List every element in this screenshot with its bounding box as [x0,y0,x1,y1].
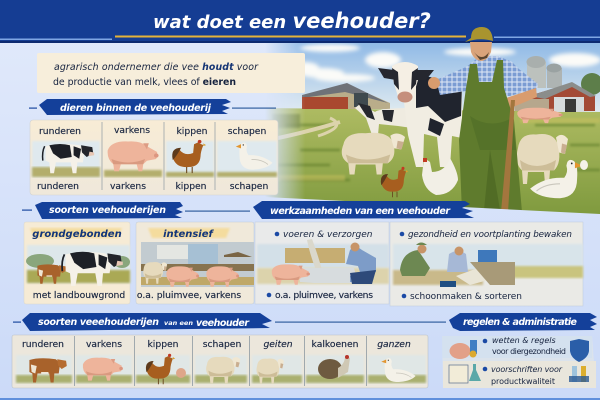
banner: soorten veeehouderijen van een veehouder: soorten veeehouderijen [38,317,159,328]
panel: soorten dieren rij: schapen [203,339,241,350]
icon: shield [570,339,589,362]
pigs far [517,108,563,123]
panel: regelen en administratie: wetten & regels [492,336,556,345]
banner: regelen en administratie: regelen & administratie [463,317,578,328]
panel: dieren: varkens [110,181,146,192]
icon: test tubes [569,366,589,382]
header band [0,0,600,43]
panel: dieren: varkens [114,125,150,136]
panel: definition: agrarisch ondernemer die vee houdt voor [54,62,259,73]
panel: dieren: kippen [176,126,208,137]
panel: dieren [30,120,278,195]
panel: regelen en administratie [442,336,596,388]
chicken orange [381,167,408,197]
panel: grondgebonden: grondgebonden [32,229,122,240]
panel: gezondheid en voortplanting: gezondheid en voortplanting bewaken [408,230,572,240]
title: wat doet een veehouder? [153,9,431,33]
big cow [378,62,462,167]
panel: soorten dieren rij: ganzen [377,339,411,350]
banner: soorten veeehouderijen van een veehouder [13,313,446,331]
geese [530,160,582,198]
meadow [265,108,600,215]
small cow [355,103,408,133]
chicken white [422,158,458,195]
icon: document and flask [449,364,481,383]
panel: soorten dieren rij: kippen [147,339,179,350]
panel: regelen en administratie: voor diergezondheid [492,347,566,356]
panel: soorten dieren rij: geiten [263,339,293,350]
panel: regelen en administratie: productkwaliteit [491,377,555,386]
farmer head and hat [465,27,493,61]
panel: intensief: intensief [163,229,215,240]
sheep right [517,134,568,184]
panel: gezondheid en voortplanting [390,222,583,306]
banner: dieren binnen de veehouderij [29,99,276,115]
banner: werkzaamheden: werkzaamheden van een veehouder [270,206,451,217]
panel: intensief [136,222,254,304]
barn right [515,82,596,112]
farmer [428,56,538,212]
panel: soorten dieren rij: runderen [22,339,64,350]
panel: definition [37,53,305,93]
panel: gezondheid en voortplanting: schoonmaken & sorteren [410,292,522,302]
tree [581,73,600,95]
banner: soorten veehouderijen: soorten veehouderijen [49,205,166,216]
icon: piggy bank [450,340,477,359]
panel: soorten dieren rij [12,335,428,388]
panel: voeren en verzorgen [255,222,389,304]
banner: soorten veeehouderijen van een veehouder: van een [164,319,193,327]
clouds [291,44,600,82]
panel: voeren en verzorgen: o.a. pluimvee, varkens [275,290,373,301]
panel: soorten dieren rij: varkens [86,339,122,350]
banner: werkzaamheden [253,201,474,219]
sheep left [342,133,405,174]
silos [526,56,562,88]
panel: dieren: schapen [228,126,266,137]
panel: grondgebonden [24,222,130,304]
panel: intensief: o.a. pluimvee, varkens [137,290,241,301]
banner: dieren binnen de veehouderij: dieren binnen de veehouderij [60,103,212,114]
banner: soorten veehouderijen [22,202,250,219]
panel: dieren: runderen [39,126,81,137]
panel: grondgebonden: met landbouwgrond [33,290,125,301]
farm scene illustration [265,42,600,215]
bottom edge [0,398,600,400]
panel: definition: de productie van melk, vlees of eieren [53,77,236,88]
banner: soorten veeehouderijen van een veehouder: veehouder [196,318,250,329]
panel: soorten dieren rij: kalkoenen [312,339,359,350]
panel: regelen en administratie: voorschriften voor [491,365,563,374]
panel: dieren: runderen [37,181,79,192]
panel: dieren: kippen [175,181,207,192]
panel: dieren: schapen [230,181,268,192]
barn left [302,83,390,109]
banner: regelen en administratie [449,313,597,331]
panel: voeren en verzorgen: voeren & verzorgen [283,230,373,240]
